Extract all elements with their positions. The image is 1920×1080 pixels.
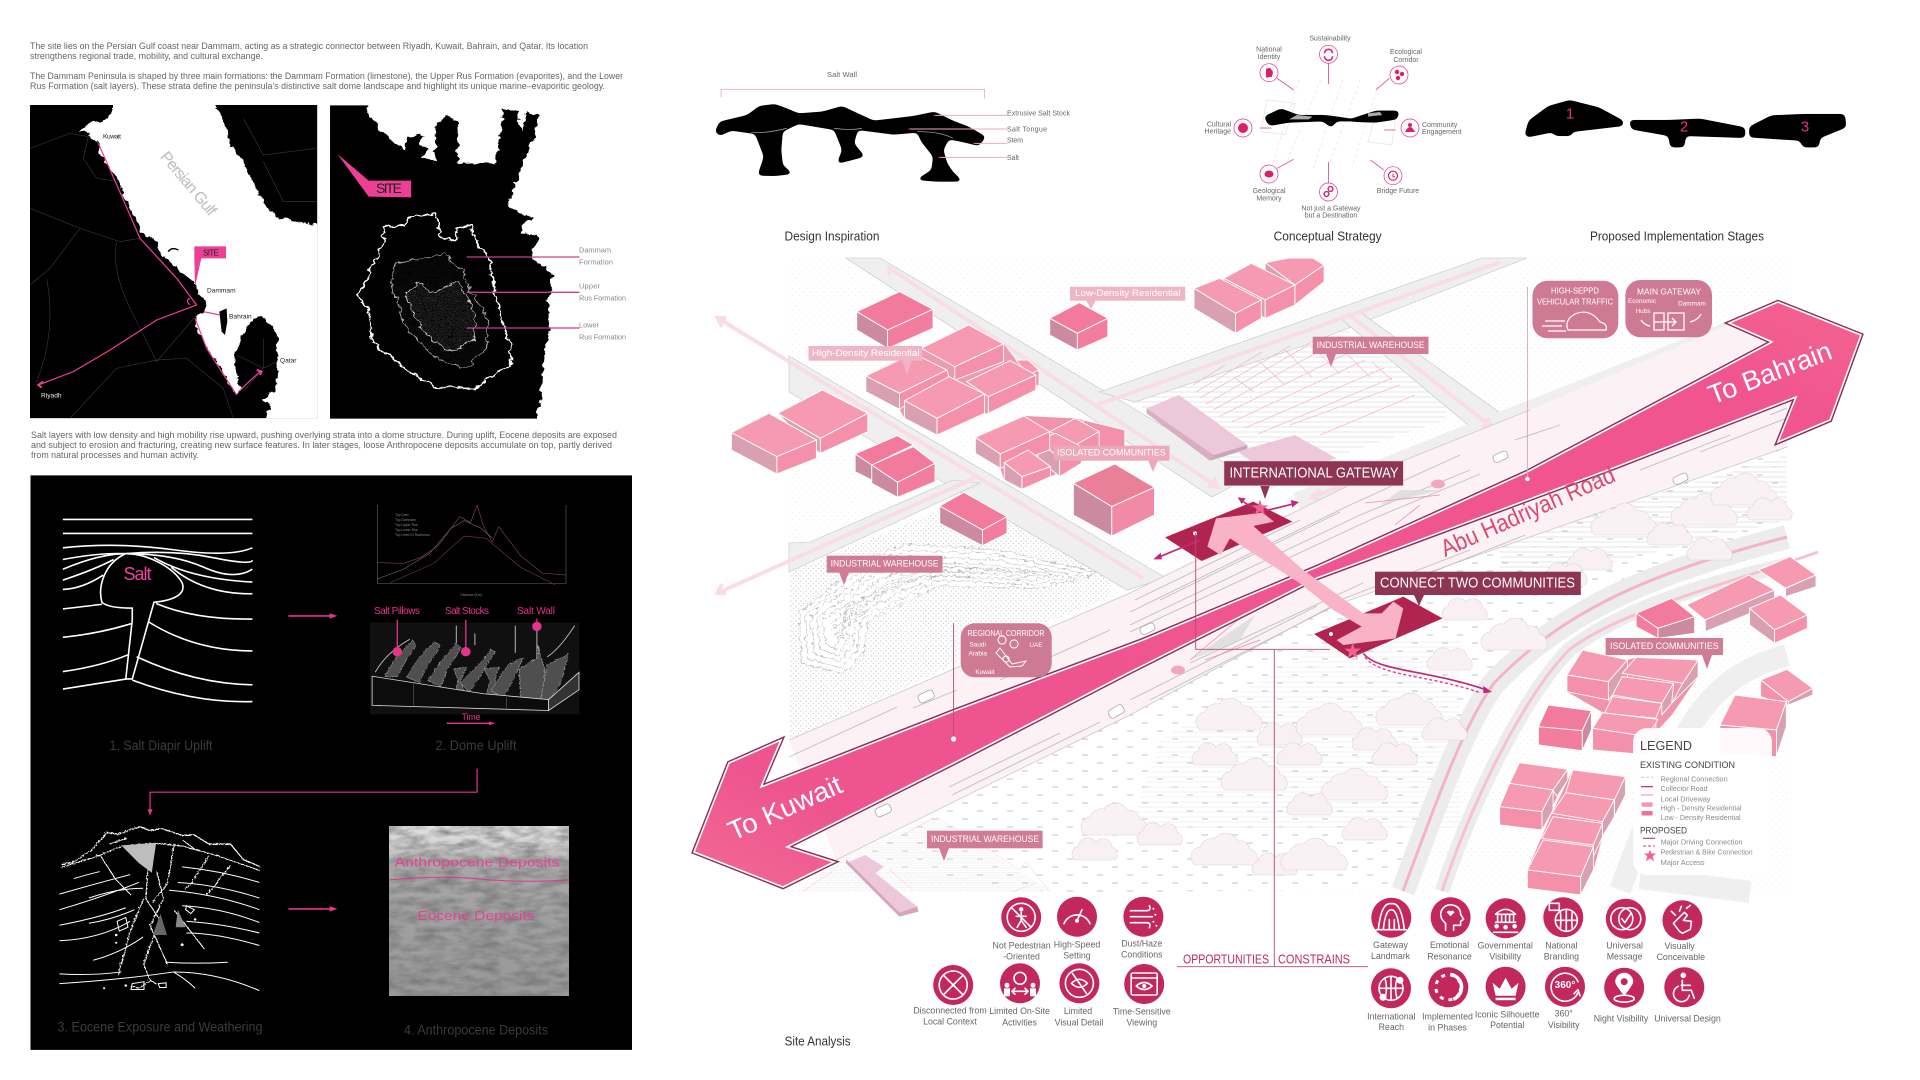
diagram: eocene exposure: [59, 826, 259, 991]
icon labels: opportunities: [1367, 940, 1721, 1032]
chart: elevation section: Top Dammam: [395, 518, 416, 522]
regional map: Kuwait: [103, 134, 121, 140]
legend: Major Driving Connection: [1661, 838, 1743, 846]
icon labels: opportunities: International: [1367, 1012, 1416, 1022]
callout: isolated communities south: ISOLATED COMMUNITIES: [1610, 641, 1719, 652]
design inspiration diagram: Extrusive Salt Stock: [1007, 110, 1070, 118]
caption: step 3: 3. Eocene Exposure and Weathering: [58, 1020, 262, 1034]
callout: international gateway: [1224, 461, 1403, 499]
conceptual strategy diagram: Identity: [1258, 54, 1281, 61]
icon: 360 visibility: [1545, 967, 1585, 1007]
chart: elevation section: [377, 505, 566, 597]
info card: regional corridor: Saudi: [970, 642, 986, 648]
icon: 360 visibility: 360°: [1555, 980, 1575, 991]
icon: iconic silhouette potential: [1486, 967, 1526, 1007]
implementation stages: 2: [1680, 118, 1688, 136]
clouds: [1072, 473, 1792, 875]
callout: industrial warehouse south: [927, 831, 1043, 861]
icon: limited visual detail: [1059, 963, 1099, 1003]
arrow: step 2 to 3: [147, 768, 477, 816]
icon labels: opportunities: Branding: [1544, 951, 1579, 961]
caption: step 1: 1. Salt Diapir Uplift: [110, 738, 213, 753]
icon labels: constraints: [913, 938, 1171, 1028]
legend: Major Access: [1661, 858, 1705, 867]
conceptual strategy diagram: Community: [1422, 122, 1458, 129]
regional connection arrows: [718, 262, 1723, 593]
icon: visually conceivable: [1662, 900, 1702, 940]
heading: opportunities: OPPORTUNITIES: [1183, 952, 1269, 966]
legend: High - Density Residential: [1661, 804, 1742, 812]
regional map: Riyadh: [41, 392, 62, 400]
regional map: SITE: [203, 248, 219, 258]
icon: international reach: [1371, 968, 1411, 1008]
regional map: Qatar: [280, 358, 297, 364]
icon labels: constraints: Not Pedestrian: [992, 940, 1051, 950]
icon labels: constraints: Activities: [1002, 1017, 1038, 1027]
conceptual strategy diagram: Ecological: [1390, 49, 1422, 56]
text: salt uplift process: and subject to erosion and fracturing, creating new surface features. In later stages, loose Anthropocene deposits accumulate on top, partly derived: [31, 440, 612, 451]
icon labels: opportunities: Resonance: [1427, 951, 1472, 961]
conceptual strategy diagram: National: [1256, 46, 1282, 54]
heading: proposed implementation stages: Proposed Implementation Stages: [1590, 230, 1764, 244]
icon: universal message: [1606, 899, 1646, 939]
icon labels: opportunities: Universal: [1606, 940, 1643, 950]
arrow: step 3 to 4: [288, 906, 337, 912]
dammam dome geology map: Rus Formation: [579, 332, 626, 342]
implementation stages: 1: [1566, 106, 1574, 122]
icon labels: constraints: Viewing: [1126, 1018, 1157, 1028]
icon labels: opportunities: Visually: [1665, 941, 1695, 951]
dammam dome geology map: Upper: [579, 282, 601, 290]
icon labels: constraints: Setting: [1063, 951, 1091, 961]
icon: national branding: [1543, 897, 1583, 937]
conceptual strategy diagram: Corridor: [1393, 57, 1419, 64]
icon: dust haze conditions: [1123, 897, 1163, 937]
photo: deposits strata: [389, 826, 569, 996]
icon labels: constraints: -Oriented: [1003, 952, 1040, 962]
info card: main gateway: [1625, 280, 1712, 337]
conceptual strategy diagram: Sustainability: [1309, 36, 1351, 42]
eye viewpoints: [1171, 480, 1445, 674]
legend: EXISTING CONDITION: [1640, 760, 1735, 770]
design inspiration diagram: Salt Wall: [827, 70, 857, 79]
intro text: peninsula formations: The Dammam Peninsula is shaped by three main formations: the Dammam Formation (limestone), the Upper Rus Formation (evaporites), and the Lower: [30, 71, 624, 82]
site analysis axonometric plan: [694, 258, 1861, 967]
icon: not just a gateway: [1320, 183, 1338, 201]
chart: elevation section: Top Umm Er Radhuma: [395, 533, 430, 537]
callout: industrial warehouse west: INDUSTRIAL WAREHOUSE: [831, 558, 939, 570]
info card: high-speed vehicular traffic: [1532, 281, 1618, 338]
info card: main gateway: Hubs: [1636, 308, 1650, 315]
conceptual strategy diagram: Bridge Future: [1377, 188, 1419, 195]
icon: disconnected from local context: [933, 965, 973, 1005]
icon: universal design: [1664, 967, 1704, 1007]
icon labels: constraints: Time-Sensitive: [1113, 1007, 1171, 1017]
diagram: salt diapir uplift: Salt: [124, 564, 152, 584]
intro text: site location: The site lies on the Persian Gulf coast near Dammam, acting as a strategic connector between Riyadh, Kuwait, Bahrain, and Qatar. Its location: [30, 41, 588, 52]
info card: regional corridor: UAE: [1029, 642, 1043, 649]
chart: elevation section: Top Dam: [395, 513, 409, 517]
diagram: salt structures block: Salt Stocks: [445, 606, 489, 617]
icon: national identity: [1260, 64, 1278, 82]
leader dots: [951, 477, 1530, 742]
icon labels: constraints: Disconnected from: [913, 1006, 987, 1016]
conceptual strategy diagram: Geological: [1252, 188, 1286, 195]
heading: constrains: CONSTRAINS: [1278, 952, 1350, 966]
dammam dome geology map: Rus Formation: [579, 294, 626, 302]
callout: international gateway: INTERNATIONAL GATEWAY: [1230, 466, 1399, 482]
info card: high-speed vehicular traffic: HIGH-SEPPD: [1551, 286, 1599, 296]
info card: regional corridor: Arabia: [968, 650, 987, 658]
icon: ecological corridor: [1390, 66, 1408, 84]
icon labels: opportunities: Night Visibility: [1594, 1013, 1649, 1023]
icon labels: opportunities: Landmark: [1371, 951, 1411, 961]
implementation stages: 3: [1801, 118, 1809, 136]
icon: emotional resonance: [1431, 897, 1471, 937]
conceptual strategy diagram: [1205, 36, 1462, 220]
icon labels: opportunities: Reach: [1379, 1022, 1404, 1032]
heading: site analysis: Site Analysis: [785, 1035, 851, 1049]
diagram: salt diapir uplift: [63, 519, 252, 702]
icon labels: opportunities: Conceivable: [1657, 952, 1705, 962]
callout: industrial warehouse north: [1313, 337, 1428, 367]
icon: night visibility: [1604, 968, 1644, 1008]
icon: sustainability: [1320, 45, 1338, 63]
residential blocks north west: [731, 258, 1324, 546]
gateway plots and connection arrow: [1153, 497, 1492, 693]
design inspiration diagram: [715, 70, 1070, 182]
panel: geology process: [30, 475, 632, 1050]
highway band: [789, 300, 1787, 860]
icon labels: opportunities: Gateway: [1373, 940, 1408, 950]
icon: bridge future: [1384, 167, 1402, 185]
photo: deposits strata: Eocene Deposits: [418, 908, 535, 923]
icon labels: constraints: Local Context: [923, 1016, 977, 1026]
icon labels: constraints: Dust/Haze: [1121, 938, 1162, 948]
callout: industrial warehouse north: INDUSTRIAL WAREHOUSE: [1317, 340, 1425, 351]
design inspiration diagram: Salt Tongue: [1007, 126, 1047, 134]
icon: geological memory: [1260, 165, 1278, 183]
dammam dome geology map: Dammam: [579, 246, 611, 254]
arrow: step 1 to 2: [288, 613, 337, 619]
dammam dome geology map: Lower: [579, 320, 600, 330]
design inspiration diagram: Stem: [1007, 138, 1023, 144]
heading: design inspiration: Design Inspiration: [784, 230, 880, 244]
intro text: peninsula formations: Rus Formation (salt layers). These strata define the peninsula’s distinctive salt dome landscape and highlight its unique marine–evaporitic geology.: [30, 81, 605, 92]
icon labels: opportunities: Iconic Silhouette: [1475, 1009, 1540, 1019]
legend: Local Driveway: [1661, 794, 1711, 804]
icon: time-sensitive viewing: [1124, 964, 1164, 1004]
topographic contour area: [798, 543, 1098, 672]
diagram: salt structures block: Salt Pillows: [374, 606, 420, 617]
info card: regional corridor: Kuwait: [975, 669, 995, 676]
legend: PROPOSED: [1640, 826, 1687, 836]
legend: Regional Connection: [1661, 774, 1728, 784]
callout: industrial warehouse west: [827, 556, 942, 585]
callout: connect two communities: [1375, 572, 1581, 606]
callout: isolated communities north: [1054, 446, 1170, 472]
heading: conceptual strategy: Conceptual Strategy: [1274, 230, 1382, 244]
intro text: site location: [30, 41, 588, 62]
chart: elevation section: Top Upper Rus: [395, 523, 418, 527]
legend: LEGEND: [1640, 738, 1692, 753]
photo: deposits strata: Anthropocene Deposits: [394, 854, 560, 870]
diagram: salt structures block: [370, 606, 579, 725]
intro text: site location: strengthens regional trade, mobility, and cultural exchange.: [30, 51, 263, 62]
icon labels: opportunities: Potential: [1490, 1020, 1524, 1030]
dammam dome geology map: Formation: [579, 258, 613, 266]
icon labels: opportunities: Universal Design: [1654, 1014, 1721, 1024]
road name: Abu Hadriyah Road: [1437, 461, 1619, 563]
icon labels: constraints: Limited: [1064, 1006, 1092, 1016]
curved road bands: [1403, 537, 1818, 892]
regional map: [30, 105, 318, 418]
design inspiration diagram: Salt: [1007, 155, 1019, 162]
info card: main gateway: Dammam: [1678, 300, 1706, 308]
text: salt uplift process: Salt layers with low density and high mobility rise upward, pushing overlying strata into a dome structure. During uplift, Eocene deposits are exposed: [31, 430, 617, 441]
callout: low-density residential: [1070, 287, 1185, 309]
regional map: Dammam: [207, 288, 236, 294]
icon: cultural heritage: [1234, 119, 1252, 137]
upper frontage road: [1300, 322, 1775, 510]
intro text: peninsula formations: [30, 71, 624, 92]
info card: regional corridor: REGIONAL CORRIDOR: [968, 628, 1044, 638]
chart: elevation section: Distance (Km): [460, 593, 482, 597]
legend: Low - Density Residential: [1661, 813, 1741, 822]
conceptual strategy diagram: Engagement: [1422, 129, 1462, 136]
icon labels: opportunities: National: [1545, 940, 1578, 950]
callout: low-density residential: Low-Density Residential: [1075, 288, 1181, 299]
cars: [874, 450, 1689, 818]
icon labels: constraints: Visual Detail: [1055, 1017, 1103, 1027]
dammam dome geology map: [321, 97, 626, 427]
callout: isolated communities south: [1606, 638, 1723, 669]
icon: implemented in phases: [1428, 967, 1468, 1007]
icon labels: opportunities: Visibility: [1548, 1020, 1580, 1030]
text: salt uplift process: from natural processes and human activity.: [31, 450, 199, 461]
conceptual strategy diagram: Not just a Gateway: [1301, 206, 1361, 212]
callout: industrial warehouse south: INDUSTRIAL WAREHOUSE: [931, 834, 1039, 845]
legend: [1633, 728, 1772, 875]
icon: gateway landmark: [1371, 898, 1411, 938]
icon labels: constraints: High-Speed: [1054, 939, 1100, 949]
main road arrow: To Bahrain: [1704, 336, 1836, 410]
icon labels: constraints: Conditions: [1121, 949, 1163, 959]
icon labels: opportunities: Visibility: [1489, 951, 1522, 961]
icon labels: opportunities: in Phases: [1428, 1022, 1467, 1032]
icon labels: constraints: Limited On-Site: [989, 1006, 1050, 1016]
icon: high-speed setting: [1057, 897, 1097, 937]
conceptual strategy diagram: but a Destination: [1305, 212, 1357, 220]
residential blocks south east: [1500, 557, 1816, 895]
text: salt uplift process: [31, 430, 617, 461]
callout: connect two communities: CONNECT TWO COMMUNITIES: [1380, 576, 1575, 592]
regional map: Bahrain: [229, 314, 252, 320]
implementation stages: [1525, 100, 1846, 147]
caption: step 2: 2. Dome Uplift: [436, 738, 517, 753]
site base ground: [789, 258, 1787, 892]
info card: regional corridor: [961, 623, 1052, 677]
info card: main gateway: MAIN GATEWAY: [1637, 286, 1701, 296]
dammam dome geology map: SITE: [376, 180, 402, 196]
industrial warehouses: [799, 344, 1415, 917]
icon: community engagement: [1401, 119, 1419, 137]
main road arrow: [694, 302, 1861, 887]
info card: main gateway: Economic: [1628, 298, 1657, 305]
regional map: Persian Gulf: [156, 149, 220, 220]
icon: governmental visibility: [1486, 898, 1526, 938]
icon labels: opportunities: Implemented: [1422, 1012, 1473, 1022]
legend: Pedestrian & Bike Connection: [1661, 848, 1753, 856]
icon labels: opportunities: Emotional: [1430, 940, 1469, 950]
conceptual strategy diagram: Memory: [1256, 196, 1282, 202]
leader lines: [954, 287, 1527, 967]
callout: high-density residential: High-Density Residential: [812, 348, 920, 359]
icon labels: opportunities: Governmental: [1478, 940, 1533, 950]
legend: Collector Road: [1661, 784, 1708, 793]
icon labels: opportunities: Message: [1607, 952, 1643, 962]
diagram: salt structures block: Salt Wall: [517, 606, 555, 617]
main road arrow: To Kuwait: [723, 769, 847, 847]
conceptual strategy diagram: Heritage: [1205, 128, 1231, 136]
icon labels: opportunities: 360°: [1555, 1009, 1573, 1019]
road network: [789, 258, 1527, 590]
icon: limited on-site activities: [1000, 963, 1040, 1003]
icon: not pedestrian oriented: [1001, 897, 1041, 937]
info card: high-speed vehicular traffic: VEHICULAR TRAFFIC: [1537, 297, 1613, 307]
callout: high-density residential: [808, 346, 922, 375]
chart: elevation section: Top Lower Rus: [395, 528, 418, 532]
caption: step 4: 4. Anthropocene Deposits: [404, 1022, 548, 1038]
diagram: salt structures block: Time: [462, 712, 480, 722]
conceptual strategy diagram: Cultural: [1207, 122, 1231, 128]
callout: isolated communities north: ISOLATED COMMUNITIES: [1057, 448, 1166, 459]
